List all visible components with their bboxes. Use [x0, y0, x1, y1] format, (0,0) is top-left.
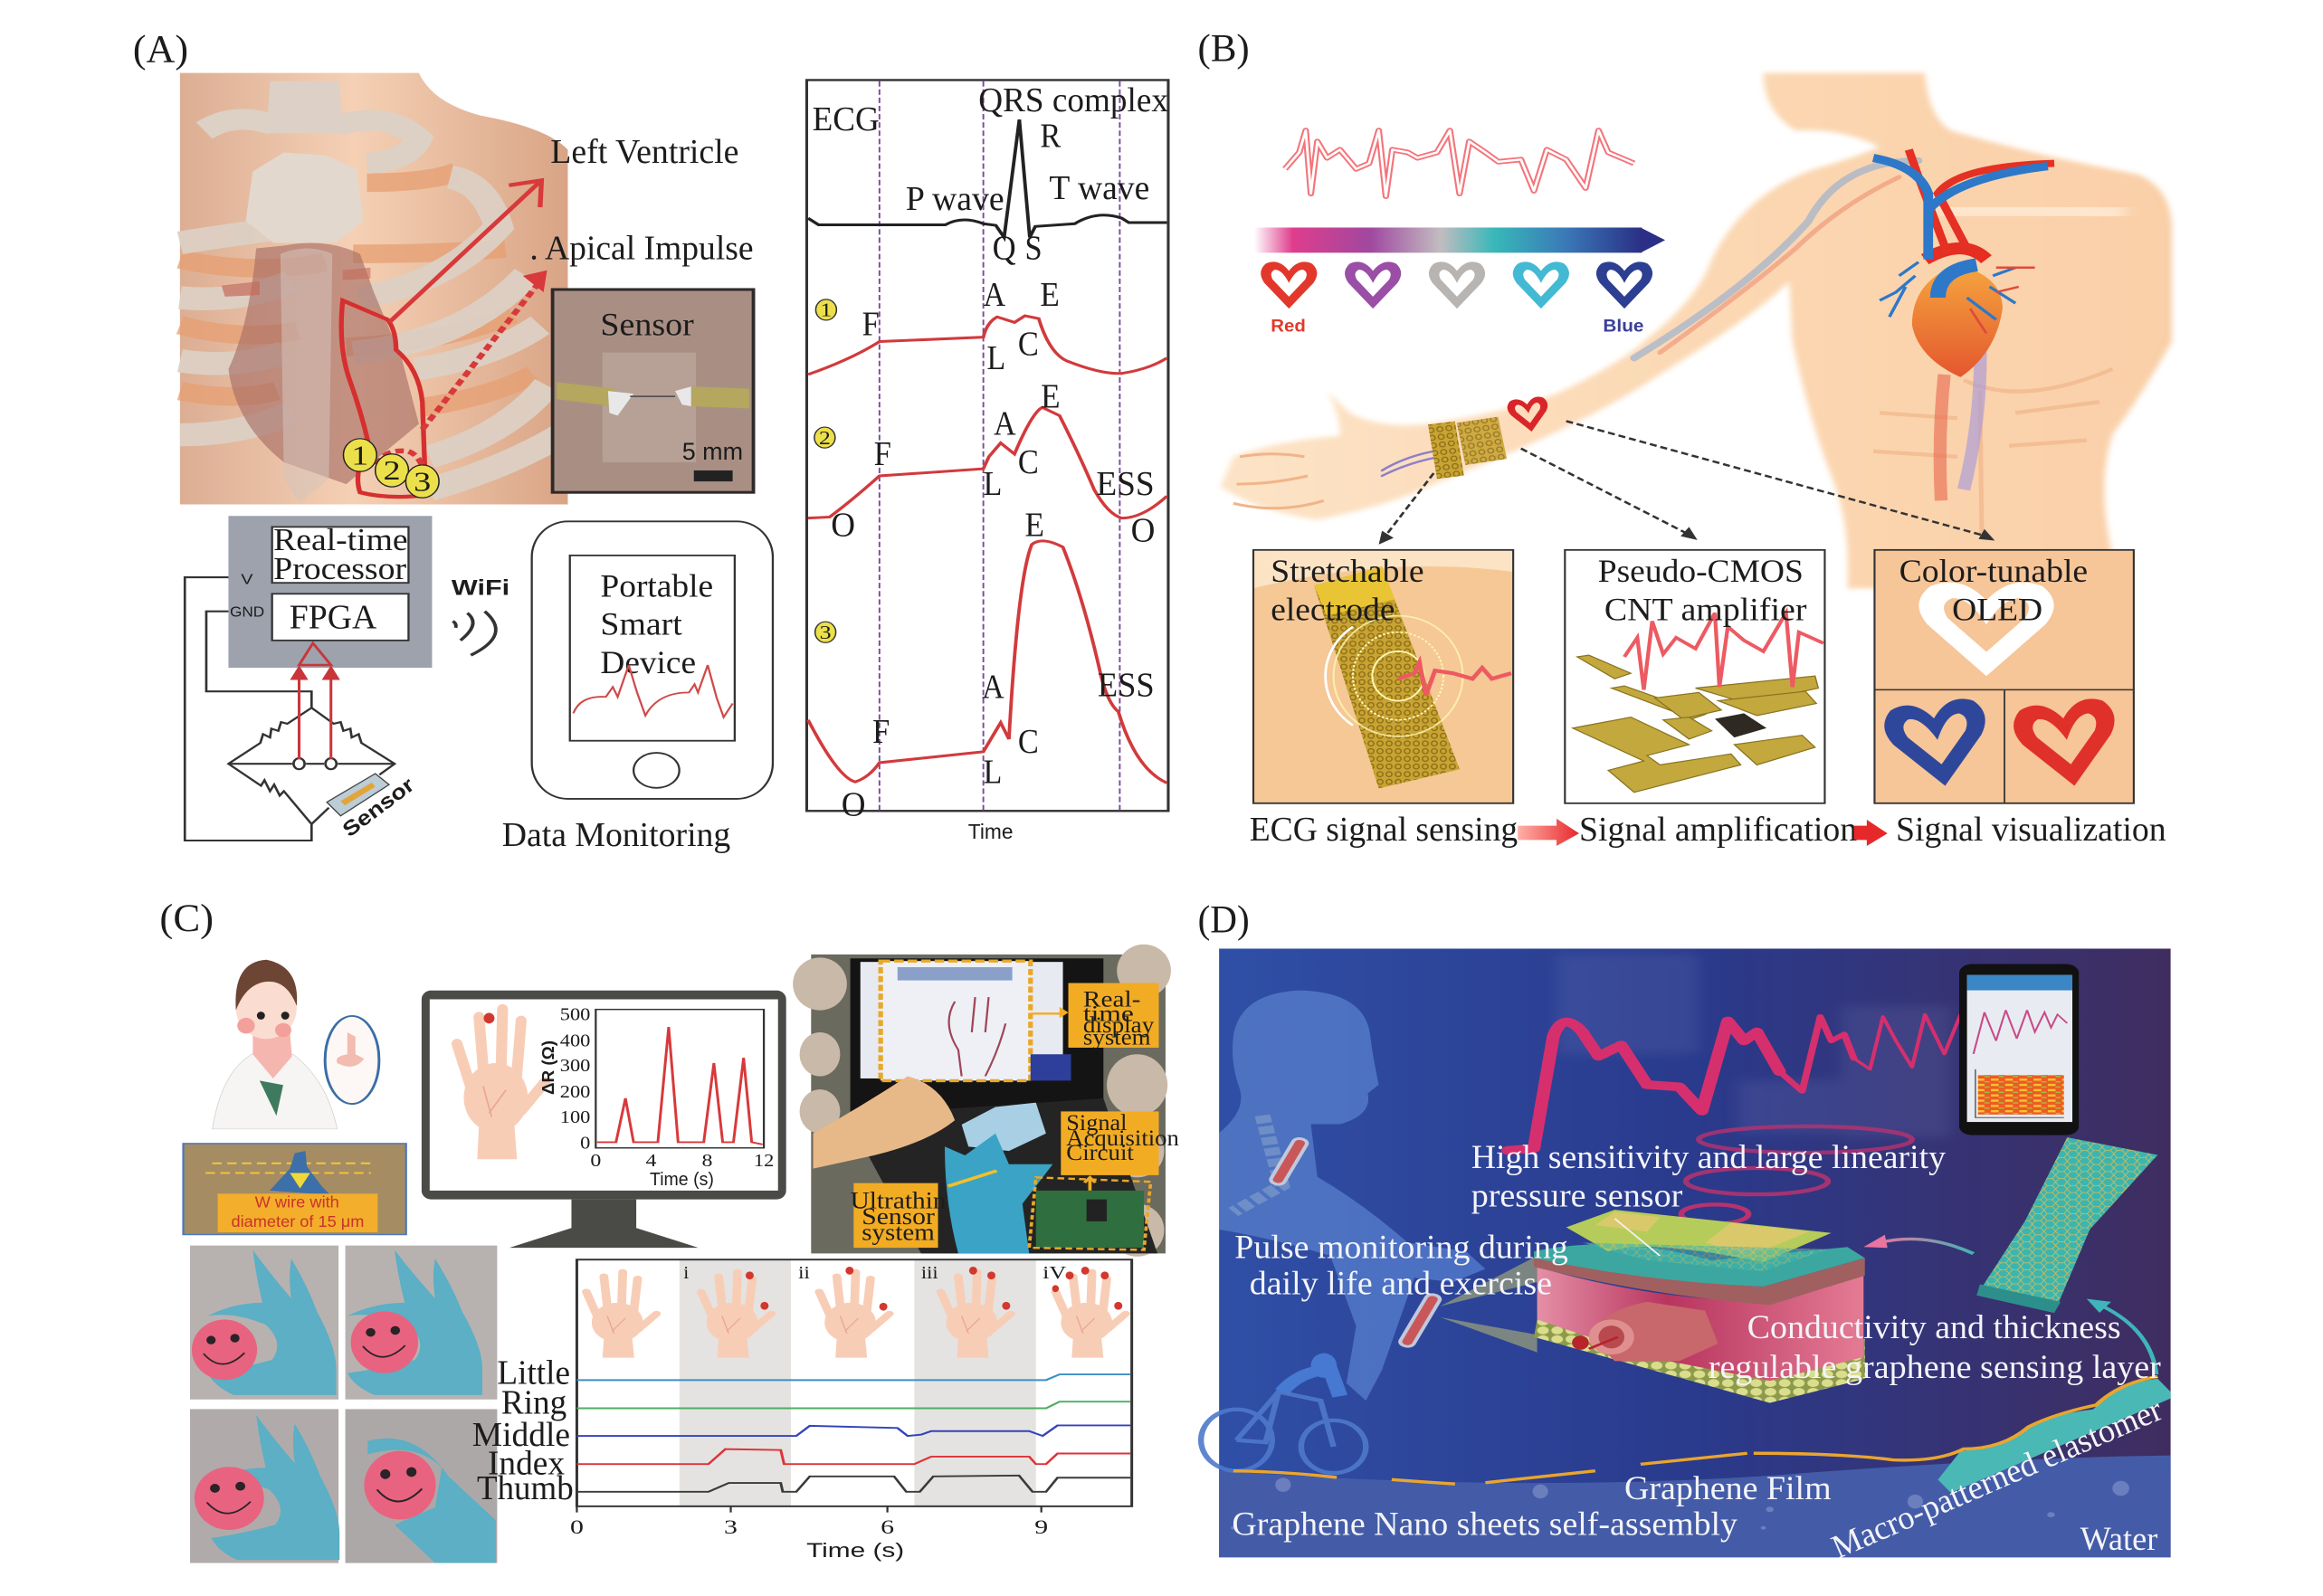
- concentric pressure rings: [1676, 1126, 1912, 1244]
- label: macro-patterned elastomer: Macro-patterned elastomer: [1826, 1392, 2167, 1566]
- ECG and apical waveforms chart: A: [982, 669, 1004, 706]
- multi-finger time series chart: Index: [488, 1443, 565, 1482]
- detail box: colour-tunable OLED: [1874, 550, 2134, 803]
- arrow: apical impulse dotted: [377, 271, 547, 479]
- panel B: skin-integrated ECG display: [1198, 27, 2172, 848]
- WiFi icon and label: [452, 575, 509, 655]
- ECG and apical waveforms chart: C: [1018, 326, 1039, 363]
- orange callout: signal acquisition circuit: Acquisition: [1066, 1126, 1179, 1151]
- ECG and apical waveforms chart: ECG: [813, 101, 880, 138]
- ECG and apical waveforms chart: P wave: [906, 181, 1004, 218]
- FPGA processor block: Real-time: [273, 521, 408, 557]
- orange callout: real-time display system: display: [1083, 1012, 1155, 1038]
- monitor with resistance chart: 8: [701, 1150, 712, 1171]
- ECG and apical waveforms chart: C: [1018, 443, 1039, 481]
- graphene film on water: [1233, 1376, 2157, 1484]
- marker numbers: [351, 441, 431, 497]
- numbered markers on chest: [343, 439, 439, 498]
- portable smart device: Portable: [600, 567, 713, 603]
- FPGA processor block: [228, 516, 432, 668]
- multi-finger time series chart: Ring: [501, 1382, 566, 1421]
- ECG and apical waveforms chart: F: [874, 435, 891, 473]
- orange callout: real-time display system: [1031, 983, 1158, 1050]
- multi-finger time series chart: Little: [497, 1354, 570, 1392]
- ECG and apical waveforms chart: QRS complex: [978, 82, 1168, 119]
- monitor with resistance chart: 4: [646, 1150, 656, 1171]
- ECG and apical waveforms chart: O: [1131, 512, 1155, 550]
- label: pulse monitoring: Pulse monitoring during: [1234, 1230, 1568, 1266]
- ECG and apical waveforms chart: ESS: [1096, 466, 1155, 503]
- vessels along arm: [1382, 161, 1918, 476]
- FPGA processor block: GND: [230, 604, 264, 620]
- multi-finger time series chart: 0: [570, 1516, 584, 1538]
- multi-finger time series chart: Thumb: [477, 1468, 574, 1507]
- multi-finger time series chart: iV: [1042, 1262, 1066, 1283]
- ECG and apical waveforms chart: L: [984, 754, 1002, 791]
- orange callout: ultrathin sensor system: Ultrathin: [851, 1188, 947, 1214]
- ECG and apical waveforms chart: 1: [820, 300, 832, 321]
- orange callout: ultrathin sensor system: Sensor: [862, 1203, 935, 1230]
- monitor with resistance chart: 200: [560, 1080, 590, 1101]
- marker numbers: 3: [414, 467, 431, 497]
- ECG and apical waveforms chart: F: [862, 306, 880, 343]
- orange callout: real-time display system: Real-: [1083, 987, 1140, 1012]
- monitor with resistance chart: Time (s): [650, 1169, 714, 1190]
- skin cross-section with artery: [1534, 1210, 1865, 1402]
- orange callout: signal acquisition circuit: [1061, 1110, 1179, 1191]
- label (C): (C): [159, 897, 214, 940]
- neck sensor: [1269, 1137, 1309, 1185]
- monitor with resistance chart: ΔR (Ω): [539, 1040, 557, 1095]
- ECG and apical waveforms chart: E: [1025, 507, 1044, 544]
- ECG and apical waveforms chart: Q: [993, 230, 1016, 267]
- monitor with resistance chart: [422, 991, 786, 1248]
- multi-finger time series chart: [472, 1259, 1132, 1563]
- arrow to graphene layer: [2087, 1299, 2156, 1374]
- sensor element: [327, 774, 389, 816]
- label Red: Red: [1271, 317, 1306, 336]
- orange callout: signal acquisition circuit: Signal: [1066, 1110, 1127, 1135]
- arrow: amplification to visualization: [1854, 820, 1888, 846]
- detail box: colour-tunable OLED: Color-tunable: [1899, 553, 2088, 589]
- label (A): (A): [133, 27, 188, 71]
- label: Water: Water: [2080, 1521, 2158, 1558]
- ECG and apical waveforms chart: F: [872, 714, 890, 751]
- Wheatstone bridge circuit: [185, 577, 395, 841]
- label: conductivity and thickness: Conductivity and thickness: [1747, 1309, 2121, 1346]
- multi-finger time series chart: 9: [1034, 1516, 1048, 1538]
- portable smart device: Device: [600, 644, 696, 680]
- caption Signal amplification: Signal amplification: [1579, 810, 1857, 848]
- portable smart device: [532, 521, 773, 799]
- translucent human figure: [1219, 991, 1485, 1401]
- ECG and apical waveforms chart: O: [831, 507, 855, 544]
- ECG and apical waveforms chart: S: [1025, 230, 1042, 267]
- ECG and apical waveforms chart: E: [1040, 277, 1060, 314]
- multi-finger time series chart: 3: [724, 1516, 738, 1538]
- multi-finger time series chart: i: [683, 1262, 689, 1283]
- label: high sensitivity: High sensitivity and large linearity: [1471, 1139, 1946, 1176]
- WiFi icon and label: WiFi: [452, 575, 509, 600]
- ECG and apical waveforms chart: [806, 80, 1168, 843]
- multi-finger time series chart: 6: [881, 1516, 894, 1538]
- orange callout: signal acquisition circuit: Circuit: [1066, 1140, 1134, 1165]
- arrow: sensing to amplification: [1518, 819, 1579, 846]
- ECG and apical waveforms chart: L: [986, 339, 1005, 377]
- label: high sensitivity: pressure sensor: [1471, 1178, 1683, 1214]
- label: conductivity and thickness: [1709, 1309, 2161, 1386]
- monitor with resistance chart: 500: [560, 1003, 590, 1024]
- macro-patterned elastomer strip: [1937, 1379, 2171, 1493]
- colour gradient arrow: [1254, 227, 1665, 252]
- detail box: stretchable electrode: Stretchable: [1271, 553, 1424, 589]
- orange callout: ultrathin sensor system: system: [862, 1220, 935, 1246]
- sensor photo: [553, 290, 754, 492]
- glove and smiley ball photos: [190, 1246, 497, 1563]
- label: high sensitivity: [1471, 1139, 1946, 1214]
- portable smart device: Smart: [600, 605, 682, 642]
- red signal arrows: [292, 643, 338, 759]
- FPGA processor block: V: [241, 571, 253, 587]
- arrow: left ventricle: [389, 180, 541, 322]
- graphene sensing layer on elastomer: [1976, 1137, 2157, 1313]
- label Apical Impulse: . Apical Impulse: [529, 230, 754, 267]
- ECG and apical waveforms chart: R: [1040, 118, 1062, 155]
- ECG and apical waveforms chart: 3: [820, 622, 832, 643]
- monitor with resistance chart: 400: [560, 1030, 590, 1050]
- light beams to skin block: [1440, 1256, 1538, 1353]
- ECG and apical waveforms chart: A: [994, 405, 1016, 442]
- human torso and arm illustration: [1221, 73, 2172, 588]
- monitor with resistance chart: 100: [560, 1107, 590, 1127]
- wire sample photo: diameter of 15 μm: [231, 1212, 364, 1230]
- detail box: colour-tunable OLED: OLED: [1952, 591, 2042, 628]
- detail box: CNT amplifier: Pseudo-CMOS: [1598, 553, 1804, 589]
- detail box: stretchable electrode: [1253, 550, 1513, 803]
- dashed arrows to detail boxes: [1379, 421, 1995, 545]
- forearm OLED heart: [1506, 395, 1552, 434]
- FPGA processor block: Processor: [273, 550, 406, 586]
- magnified fingertip oval: [325, 1016, 379, 1104]
- panel A: ECG and apical impulse sensing: [133, 27, 1168, 854]
- detail box: stretchable electrode: electrode: [1271, 591, 1395, 628]
- orange callout: real-time display system: system: [1083, 1025, 1151, 1050]
- chest anatomy illustration: [180, 73, 567, 505]
- cyclist: [1201, 1354, 1366, 1473]
- ECG glowing waveform: [1285, 130, 1634, 196]
- smartphone with app: [1959, 964, 2079, 1135]
- ECG and apical waveforms chart: A: [984, 277, 1005, 314]
- FPGA processor block: FPGA: [290, 599, 376, 636]
- wire sample photo: W wire with: [255, 1192, 339, 1211]
- caption ECG signal sensing: ECG signal sensing: [1250, 810, 1518, 848]
- multi-finger time series chart: iii: [921, 1262, 938, 1283]
- orange callout: real-time display system: time: [1083, 1002, 1134, 1026]
- ECG and apical waveforms chart: O: [842, 786, 866, 824]
- sensor photo: Sensor: [600, 306, 694, 342]
- monitor with resistance chart: 12: [754, 1150, 774, 1171]
- label (B): (B): [1198, 27, 1250, 70]
- pink pulse waveform: [1508, 1010, 2067, 1151]
- detail box: CNT amplifier: CNT amplifier: [1604, 591, 1806, 628]
- caption Data Monitoring: Data Monitoring: [502, 817, 730, 854]
- ECG and apical waveforms chart: T wave: [1049, 169, 1149, 207]
- ECG and apical waveforms chart: Time: [968, 820, 1014, 843]
- sensor label: Sensor: [338, 773, 419, 841]
- ECG and apical waveforms chart: 2: [819, 428, 831, 449]
- arrow to sensor: [1863, 1235, 1974, 1254]
- ECG and apical waveforms chart: E: [1041, 378, 1061, 415]
- label: pulse monitoring: daily life and exercise: [1250, 1266, 1552, 1302]
- label Blue: Blue: [1603, 317, 1644, 336]
- label (D): (D): [1198, 898, 1250, 941]
- wire sample photo: [184, 1144, 406, 1234]
- panel D: graphene pressure sensor pulse monitoring: [1198, 898, 2171, 1566]
- real-time system photo: [793, 945, 1171, 1257]
- label: Graphene Film: Graphene Film: [1624, 1470, 1832, 1507]
- label Left Ventricle: Left Ventricle: [550, 134, 738, 171]
- ECG and apical waveforms chart: ESS: [1098, 667, 1155, 704]
- forearm electrode patch: [1428, 422, 1464, 479]
- monitor with resistance chart: 0: [580, 1132, 590, 1153]
- sensor element stripe: [340, 783, 376, 805]
- detail box: CNT amplifier: [1565, 550, 1824, 803]
- caption Signal visualization: Signal visualization: [1896, 810, 2166, 848]
- marker numbers: 2: [383, 456, 401, 486]
- colour-tunable heart row: [1261, 261, 1652, 309]
- multi-finger time series chart: Time (s): [806, 1540, 904, 1563]
- orange callout: ultrathin sensor system: [851, 1171, 996, 1248]
- multi-finger time series chart: Middle: [472, 1415, 570, 1453]
- monitor with resistance chart: 0: [590, 1150, 601, 1171]
- wrist sensor: [1398, 1293, 1442, 1348]
- scene background with water: [1219, 948, 2171, 1557]
- label: self-assembly: Graphene Nano sheets self-assembly: [1232, 1506, 1737, 1543]
- marker numbers: 1: [351, 441, 368, 470]
- multi-finger time series chart: ii: [798, 1262, 810, 1283]
- heart outline in red: [341, 300, 426, 497]
- panel C: fingertip tactile sensing: [159, 897, 1179, 1563]
- doctor illustration: [213, 960, 338, 1129]
- heart with vessels: [1873, 149, 2054, 500]
- label: pulse monitoring: [1234, 1230, 1568, 1302]
- ECG and apical waveforms chart: L: [984, 466, 1002, 503]
- monitor with resistance chart: 300: [560, 1055, 590, 1076]
- sensor photo: 5 mm: [682, 439, 743, 465]
- ECG and apical waveforms chart: C: [1018, 724, 1039, 761]
- forearm amplifier patch: [1457, 417, 1507, 465]
